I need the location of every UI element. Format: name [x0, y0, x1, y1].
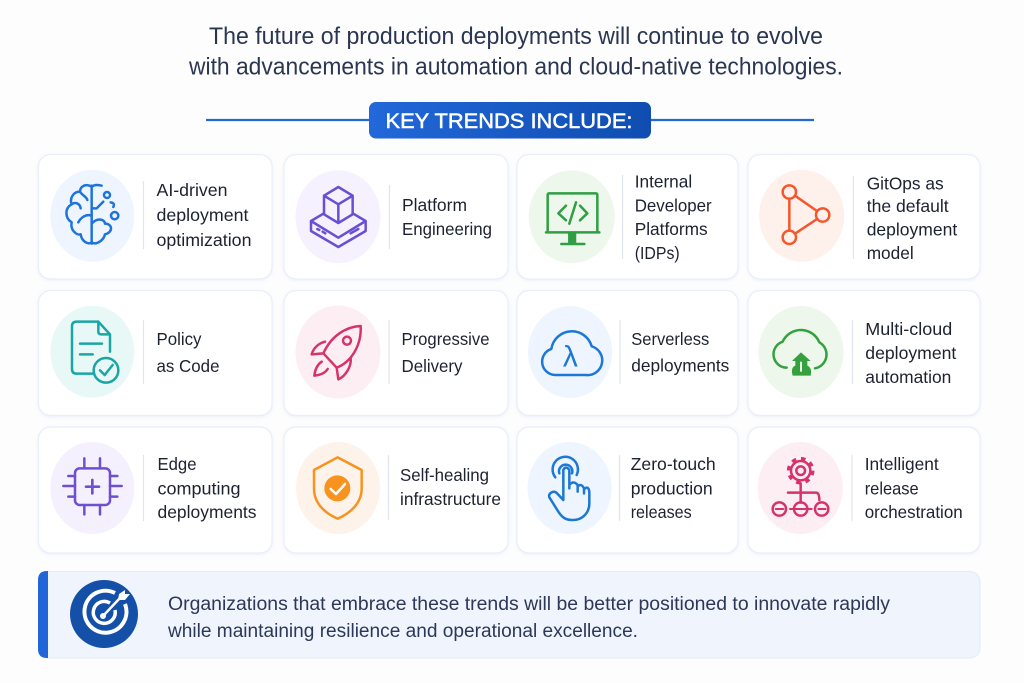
label — [631, 454, 716, 522]
conclusion text: while maintaining resilience and operational excellence. — [167, 621, 638, 642]
label: deployments — [631, 356, 730, 376]
label: Progressive — [402, 329, 490, 349]
label: Edge — [158, 454, 196, 474]
label: deployment — [156, 205, 249, 225]
conclusion text — [167, 594, 891, 642]
label — [865, 319, 956, 387]
label: Serverless — [631, 329, 710, 349]
icon: lambda cloud: λ — [563, 340, 578, 373]
label — [402, 329, 490, 376]
panel: conclusion banner — [38, 571, 980, 658]
label: as Code — [156, 356, 220, 376]
conclusion text: Organizations that embrace these trends will be better positioned to innovate rapidly — [168, 594, 891, 615]
label — [865, 454, 963, 522]
label — [402, 195, 492, 239]
label: production — [631, 478, 713, 498]
label: deployment — [867, 220, 957, 240]
card: GitOps — [748, 154, 980, 279]
icon: touch hand — [528, 442, 612, 534]
icon: policy document — [50, 306, 134, 398]
label: deployment — [865, 343, 956, 363]
icon: target — [70, 580, 138, 648]
label: Platforms — [635, 219, 708, 239]
intro text: with advancements in automation and cloud-native technologies. — [188, 54, 843, 80]
label: GitOps as — [867, 174, 944, 194]
intro text: The future of production deployments will continue to evolve — [209, 23, 823, 50]
label — [867, 174, 957, 263]
label: deployments — [158, 502, 257, 522]
label: optimization — [156, 230, 252, 250]
card: Platform Engineering — [284, 154, 508, 279]
icon: gear workflow — [758, 442, 843, 534]
label — [156, 329, 220, 376]
icon: cloud upload — [758, 306, 844, 398]
card: Intelligent release orchestration — [748, 427, 980, 553]
card: Policy as Code — [38, 290, 272, 416]
label: the default — [867, 196, 949, 216]
label: (IDPs) — [635, 243, 680, 263]
heading: key trends: KEY TRENDS INCLUDE: — [386, 110, 632, 133]
label: releases — [631, 502, 692, 522]
label: Platform — [402, 195, 467, 215]
card: Multi-cloud deployment automation — [748, 290, 980, 416]
label: Developer — [635, 196, 712, 216]
label: AI-driven — [156, 180, 228, 200]
label — [156, 180, 252, 250]
label: Zero-touch — [631, 454, 716, 474]
icon: chip — [50, 442, 134, 534]
label: Intelligent — [865, 454, 939, 474]
label — [400, 465, 501, 509]
icon: brain — [50, 170, 134, 262]
intro text — [188, 23, 843, 80]
card: Serverless deployments — [517, 290, 738, 416]
icon: git triangle — [759, 170, 844, 262]
icon: lambda cloud — [528, 306, 612, 398]
card: Zero-touch production releases — [517, 427, 738, 553]
label — [158, 454, 257, 522]
card: Self-healing infrastructure — [284, 427, 508, 553]
card: Progressive Delivery — [284, 290, 508, 416]
label: Delivery — [402, 356, 463, 376]
heading: key trends — [206, 102, 814, 138]
icon: shield — [296, 442, 380, 534]
card: Edge computing deployments — [38, 427, 272, 553]
label: release — [865, 478, 919, 498]
label: Self-healing — [400, 465, 489, 485]
label: Multi-cloud — [865, 319, 952, 339]
label — [635, 172, 712, 263]
label: computing — [158, 478, 240, 498]
label: infrastructure — [400, 489, 501, 509]
label: orchestration — [865, 502, 963, 522]
label: Policy — [156, 329, 202, 349]
label: Internal — [635, 172, 692, 192]
label: model — [867, 243, 914, 263]
card: Internal Developer Platforms — [517, 154, 738, 279]
label: automation — [865, 367, 951, 387]
label — [631, 329, 730, 376]
icon: rocket — [296, 306, 380, 398]
icon: cube on platform — [296, 170, 380, 263]
card: AI-driven deployment optimization — [38, 154, 272, 279]
label: Engineering — [402, 219, 492, 239]
icon: code monitor — [529, 170, 615, 263]
